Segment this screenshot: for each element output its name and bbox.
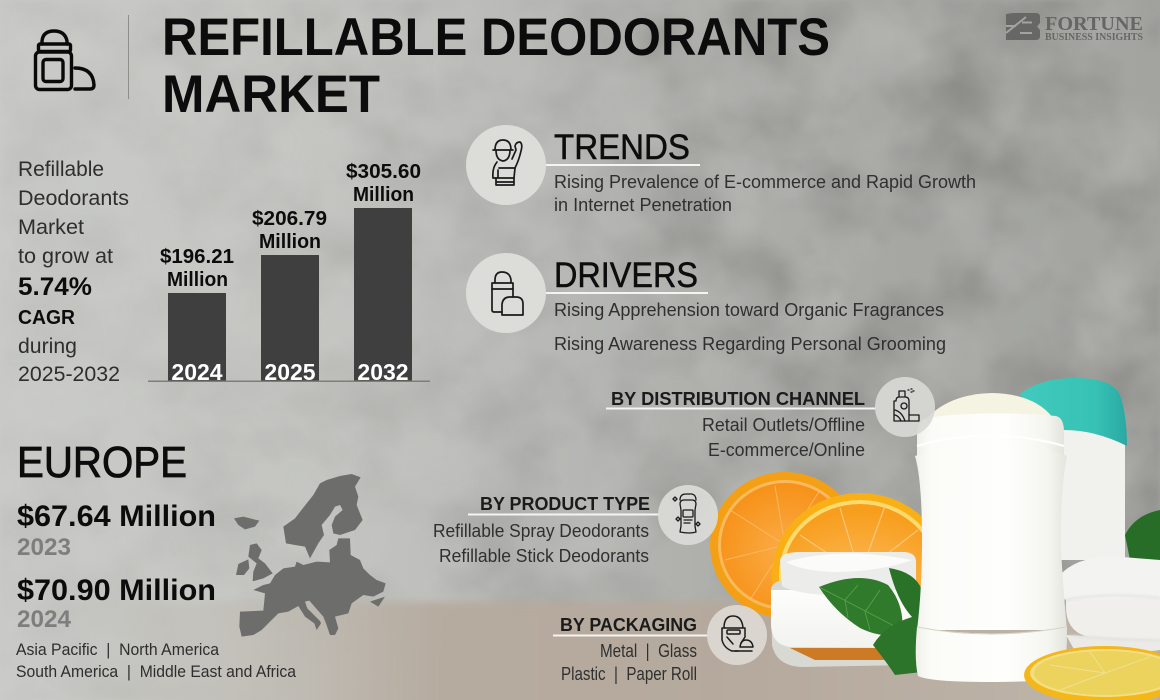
CAGR text block: 2025-2032 xyxy=(18,363,120,386)
green leaves xyxy=(819,510,1160,675)
title: REFILLABLE DEODORANTS xyxy=(162,8,830,67)
panel: trends xyxy=(466,125,976,215)
icon: header deodorant xyxy=(36,31,94,90)
packaging text xyxy=(561,640,697,684)
drivers text xyxy=(554,299,946,354)
bar 2032: Million xyxy=(353,184,414,206)
towels xyxy=(1060,556,1160,660)
orange half front xyxy=(772,493,948,657)
distribution text xyxy=(702,414,865,460)
bar 2024: Million xyxy=(167,269,228,291)
CAGR text block: during xyxy=(18,335,77,358)
other regions xyxy=(16,641,297,681)
CAGR text block: 5.74% xyxy=(18,273,92,301)
heading: Europe: EUROPE xyxy=(17,438,187,487)
icon: spray can xyxy=(875,377,935,437)
logo: Fortune Business Insights: BUSINESS INSIGHTS xyxy=(1045,32,1143,43)
bar 2025: 2025 xyxy=(264,359,316,385)
other regions: Asia Pacific | North America xyxy=(16,641,220,659)
cream jar xyxy=(771,552,916,667)
product type text xyxy=(433,520,649,566)
product type text: Refillable Spray Deodorants xyxy=(433,520,649,541)
panel: by distribution channel xyxy=(606,377,935,460)
distribution text: E-commerce/Online xyxy=(708,439,865,460)
title: MARKET xyxy=(162,65,380,124)
CAGR text block: Deodorants xyxy=(18,187,129,210)
logo: Fortune Business Insights xyxy=(1006,13,1143,43)
packaging text: Metal | Glass xyxy=(600,640,697,661)
bar 2024 xyxy=(160,246,234,385)
CAGR text block: Refillable xyxy=(18,158,104,181)
title xyxy=(162,8,830,124)
white deodorant stick xyxy=(915,393,1067,682)
bar 2025: Million xyxy=(259,231,321,253)
bar 2025 xyxy=(252,208,327,385)
value 2024: 2024 xyxy=(17,606,72,633)
trends text: in Internet Penetration xyxy=(554,194,732,215)
product type text: Refillable Stick Deodorants xyxy=(439,545,649,566)
photo: product still life xyxy=(710,378,1160,700)
panel: by product type xyxy=(433,485,718,566)
bar 2032 xyxy=(346,161,421,385)
icon: person with raised arm xyxy=(466,125,546,205)
bar chart xyxy=(148,161,430,385)
heading: packaging: BY PACKAGING xyxy=(560,614,697,635)
heading: trends: TRENDS xyxy=(554,128,690,167)
panel: drivers xyxy=(466,253,946,354)
value 2024: $70.90 Million xyxy=(17,574,216,607)
teal-capped deodorant behind xyxy=(1020,378,1127,560)
logo wordmark: FORTUNE xyxy=(1045,13,1143,35)
panel: Europe stats xyxy=(16,438,297,681)
bar 2024: $196.21 xyxy=(160,246,234,268)
CAGR text block: to grow at xyxy=(18,245,113,268)
bar 2032: 2032 xyxy=(357,359,409,385)
header divider xyxy=(128,15,129,99)
value 2023: 2023 xyxy=(17,534,71,561)
trends text xyxy=(554,171,976,215)
panel: by packaging xyxy=(553,605,767,684)
value 2024 xyxy=(17,574,216,633)
map: Europe xyxy=(234,474,386,637)
lemon slice xyxy=(1024,646,1160,700)
icon: sparkling stick xyxy=(658,485,718,545)
orange half rear xyxy=(710,472,860,618)
distribution text: Retail Outlets/Offline xyxy=(702,414,865,435)
CAGR text block xyxy=(18,158,129,386)
icon: deodorant and cap xyxy=(466,253,546,333)
CAGR text block: Market xyxy=(18,216,84,239)
CAGR text block: CAGR xyxy=(18,307,76,329)
value 2023 xyxy=(17,500,216,561)
icon: roll-on xyxy=(707,605,767,665)
bar 2024: 2024 xyxy=(171,359,223,385)
other regions: South America | Middle East and Africa xyxy=(16,663,297,681)
packaging text: Plastic | Paper Roll xyxy=(561,663,697,684)
bar 2025: $206.79 xyxy=(252,208,327,230)
heading: product type: BY PRODUCT TYPE xyxy=(480,493,650,514)
logo mark xyxy=(1006,13,1040,40)
bar 2032: $305.60 xyxy=(346,161,421,183)
trends text: Rising Prevalence of E-commerce and Rapid Growth xyxy=(554,171,976,192)
heading: distribution: BY DISTRIBUTION CHANNEL xyxy=(611,388,865,409)
heading: drivers: DRIVERS xyxy=(554,256,698,295)
drivers text: Rising Apprehension toward Organic Fragrances xyxy=(554,299,944,320)
drivers text: Rising Awareness Regarding Personal Grooming xyxy=(554,333,946,354)
value 2023: $67.64 Million xyxy=(17,500,216,533)
